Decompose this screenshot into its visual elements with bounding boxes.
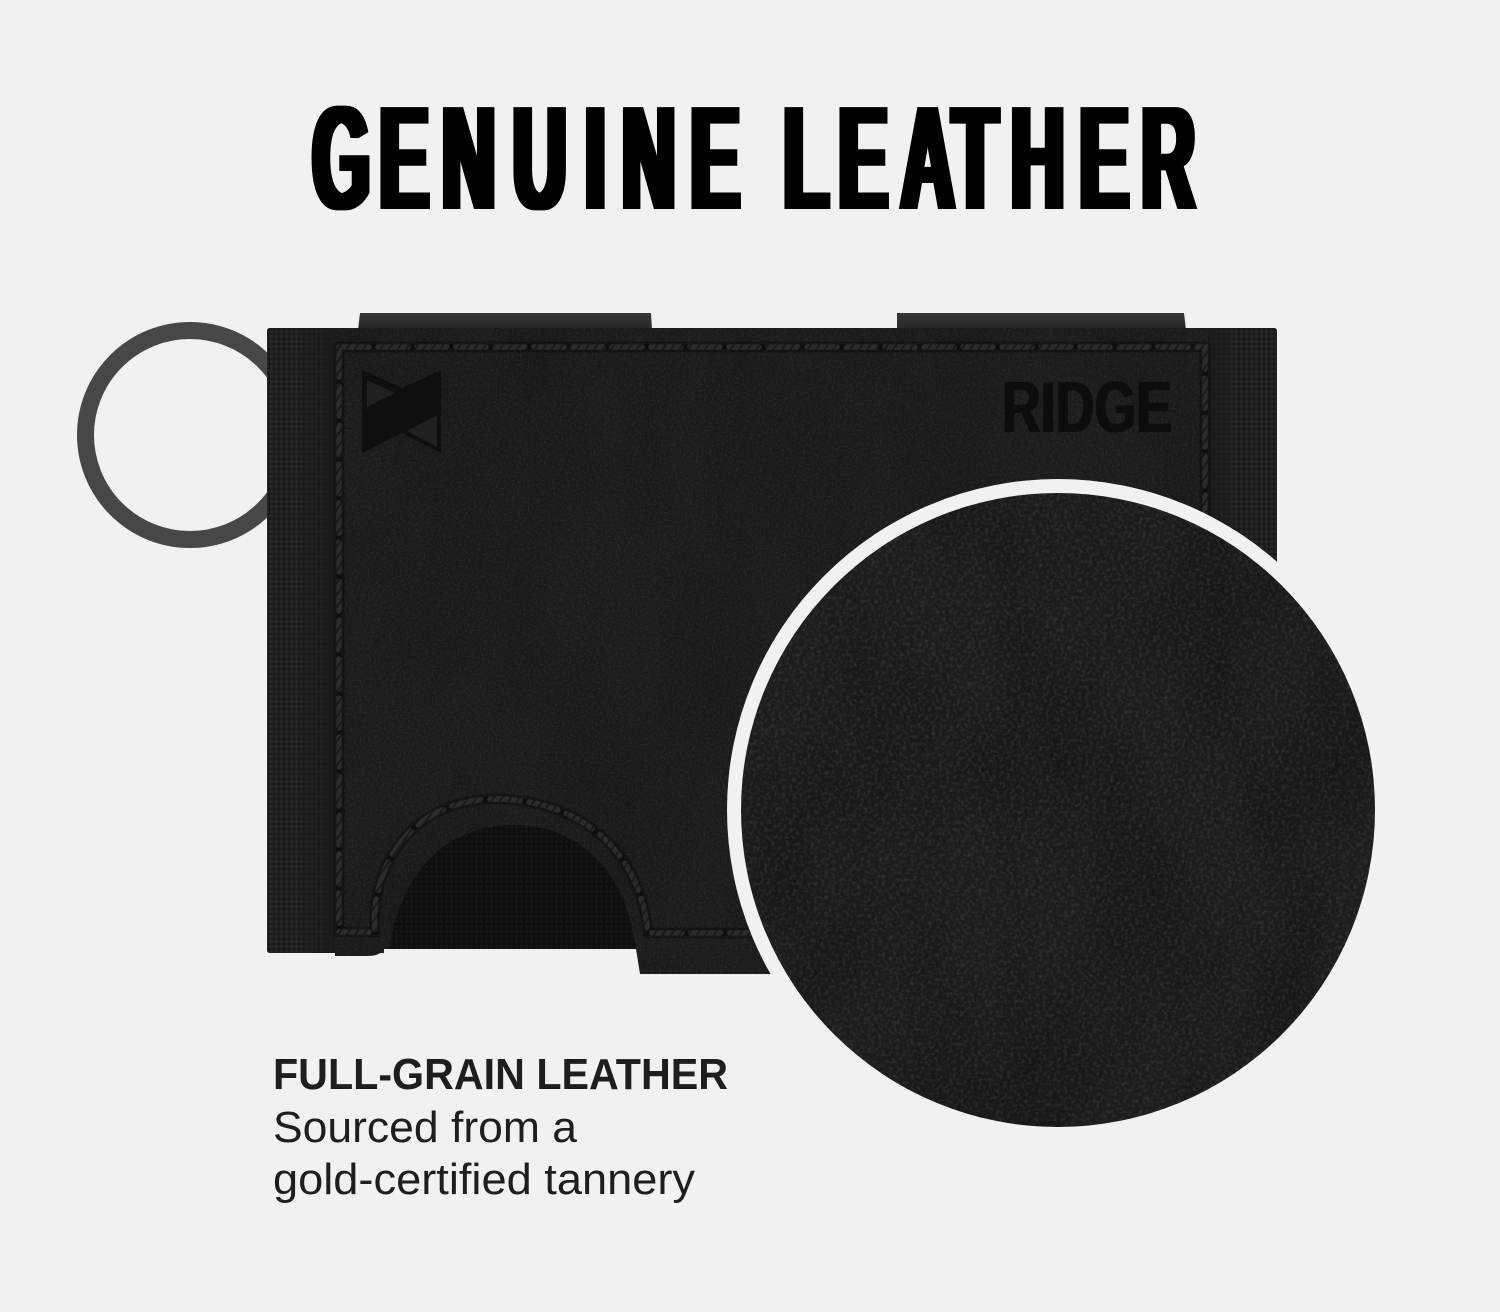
logo: embossed X mark xyxy=(362,370,441,453)
logo: embossed RIDGE wordmark: RIDGE xyxy=(1002,368,1172,448)
zoom circle: leather texture close-up xyxy=(727,479,1389,1141)
icon: key ring xyxy=(86,330,294,540)
leather panel xyxy=(320,326,1220,1006)
heading: FULL-GRAIN LEATHER xyxy=(273,1050,728,1099)
stitching xyxy=(339,347,1205,933)
title: GENUINE LEATHER xyxy=(312,75,1195,241)
wallet top tabs xyxy=(358,313,1186,330)
text block: full-grain leather xyxy=(273,1050,728,1204)
wallet xyxy=(267,313,1277,1006)
card slot notch xyxy=(384,800,640,949)
description line 1: Sourced from a xyxy=(273,1103,578,1152)
description line 2: gold-certified tannery xyxy=(273,1155,695,1204)
elastic fabric body xyxy=(267,328,1277,968)
